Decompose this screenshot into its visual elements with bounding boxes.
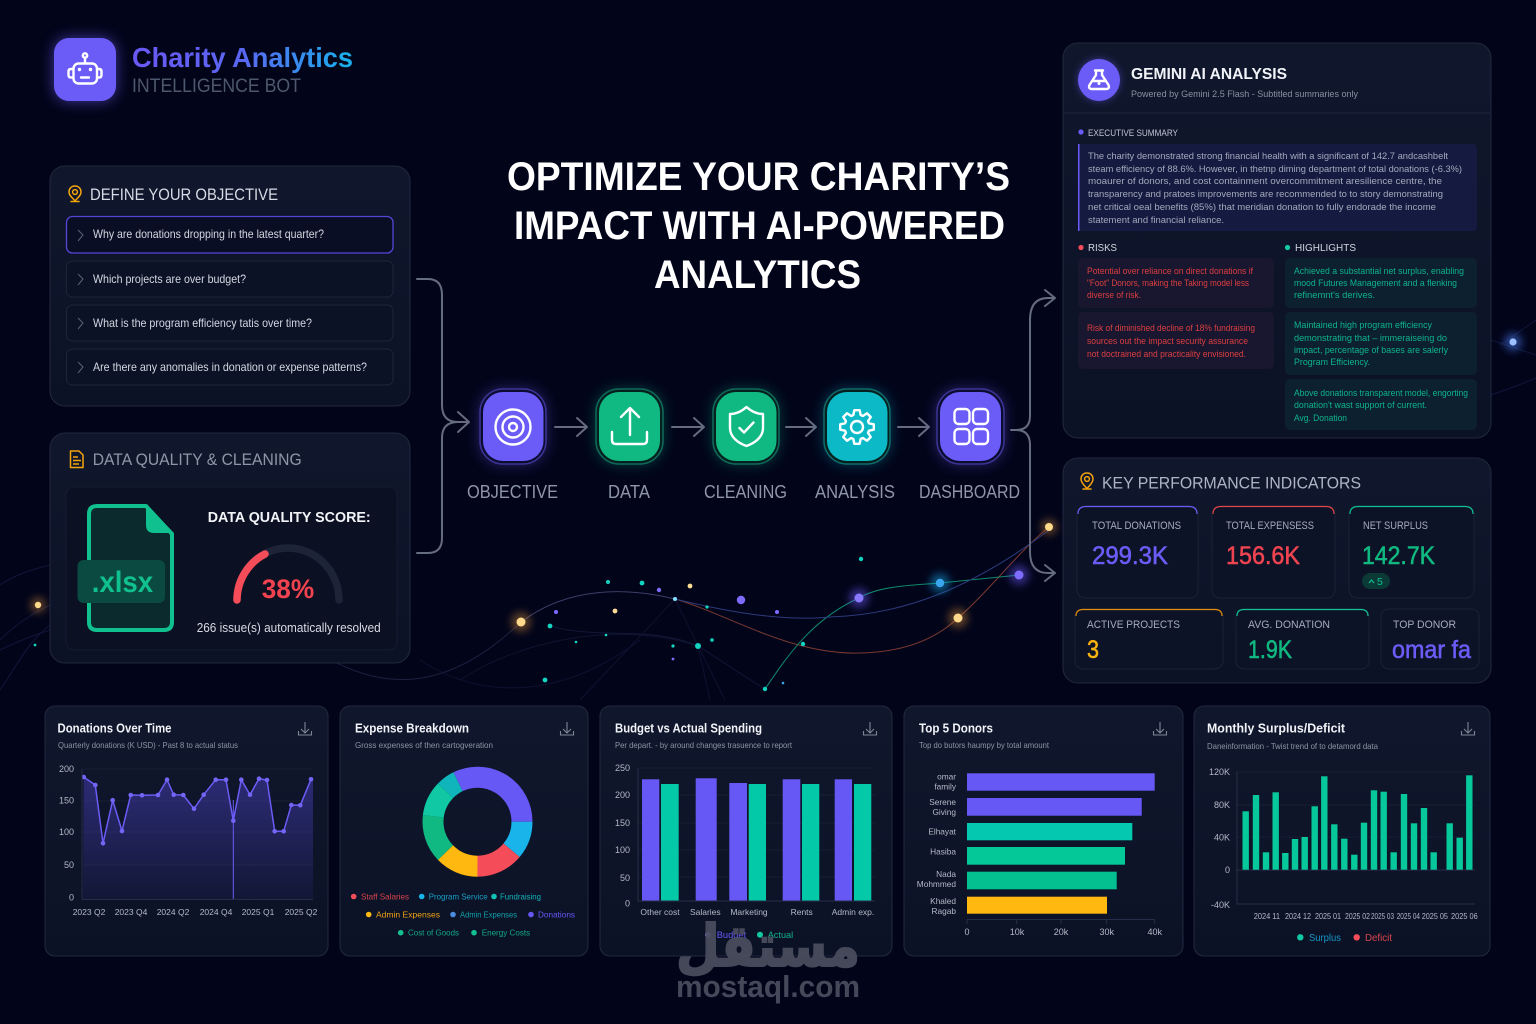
chart subtitle: Per depart. - by around changes trasuence to report — [615, 740, 793, 750]
column chart: -40K — [1211, 900, 1230, 910]
chart card: monthly surplus deficit — [1194, 706, 1490, 956]
horizontal bar chart: Serene — [929, 797, 956, 807]
brand subtitle: INTELLIGENCE BOT — [132, 76, 301, 97]
bar legend: Budget — [717, 930, 747, 941]
chart card: expense breakdown — [340, 706, 588, 956]
grouped bar chart — [615, 763, 875, 917]
arrow — [898, 418, 929, 436]
step: objective — [467, 389, 558, 502]
horizontal bar chart: 20k — [1054, 927, 1069, 937]
risk card 2: sources out the impact security assurance — [1087, 336, 1248, 347]
kpi: top donor: omar fa — [1392, 636, 1471, 664]
column legend: Deficit — [1365, 933, 1392, 944]
executive summary text: statement and financial reliance. — [1088, 215, 1224, 226]
donut legend: Donations — [538, 910, 575, 920]
question 3: What is the program efficiency tatis over time? — [93, 316, 312, 330]
highlight card 3: donation't wast support of current. — [1294, 400, 1427, 411]
line chart: 0 — [69, 892, 74, 902]
kpi: active projects — [1075, 609, 1223, 669]
main title — [507, 155, 1010, 297]
step: cleaning — [704, 389, 787, 502]
chart title: Top 5 Donors — [919, 720, 993, 736]
donut legend: Energy Costs — [482, 928, 530, 938]
line chart: 2025 Q1 — [242, 907, 275, 917]
line chart: 2025 Q2 — [285, 907, 318, 917]
kpi: total donations: TOTAL DONATIONS — [1092, 520, 1181, 532]
horizontal bar chart: Ragab — [932, 906, 956, 916]
panel: data quality and cleaning — [50, 433, 410, 663]
panel: gemini ai analysis — [1063, 43, 1491, 438]
question 1 (selected) — [66, 216, 393, 253]
highlight card 3: Avg. Donation — [1294, 413, 1347, 424]
kpi: total expenses: TOTAL EXPENSESS — [1226, 520, 1314, 532]
question 3 — [66, 305, 393, 341]
kpi: total donations: 299.3K — [1092, 542, 1168, 570]
executive summary text: The charity demonstrated strong financial health with a significant of 142.7 andcashbelt — [1088, 151, 1448, 162]
executive summary text: steam efficiency of 88.6%. However, in thetnp diming department of total donations (-6.3%) — [1088, 164, 1462, 175]
main title: ANALYTICS — [654, 253, 861, 297]
horizontal bar chart: Giving — [932, 807, 956, 817]
arrow — [555, 418, 587, 436]
connector: panels to objective — [417, 279, 469, 553]
bar legend: Actual — [768, 930, 793, 941]
column chart: 0 — [1225, 865, 1230, 875]
grouped bar chart: 150 — [615, 818, 630, 828]
line chart: 2023 Q2 — [73, 907, 106, 917]
highlight card 3: Above donations transparent model, engorting — [1294, 388, 1468, 399]
risk card 1 — [1078, 258, 1274, 308]
main title: IMPACT WITH AI-POWERED — [514, 204, 1005, 248]
risk card 2 — [1078, 312, 1274, 369]
grouped bar chart: 0 — [625, 898, 630, 908]
kpi: total donations — [1077, 506, 1198, 598]
icon: flask — [1078, 59, 1120, 101]
question 4 — [66, 349, 393, 385]
line chart: 2023 Q4 — [115, 907, 148, 917]
highlight card 1: mood Futures Management and a flenking — [1294, 278, 1457, 289]
heading: define your objective: DEFINE YOUR OBJECTIVE — [90, 186, 278, 204]
column chart — [1209, 767, 1478, 921]
column chart: 2025 06 — [1451, 911, 1478, 921]
panel: define your objective — [50, 166, 410, 406]
chart subtitle: Gross expenses of then cartogveration — [355, 740, 493, 750]
line chart: 2024 Q2 — [157, 907, 190, 917]
grouped bar chart: Rents — [791, 907, 813, 917]
horizontal bar chart: omar — [937, 772, 956, 782]
arrow — [672, 418, 704, 436]
chart title: Budget vs Actual Spending — [615, 720, 762, 736]
line chart: 100 — [59, 827, 74, 837]
logo icon: robot — [54, 38, 116, 101]
column chart: 2024 11 — [1254, 911, 1280, 921]
icon: download — [1462, 722, 1474, 735]
step: dashboard: DASHBOARD — [919, 482, 1020, 502]
heading: gemini: GEMINI AI ANALYSIS — [1131, 66, 1287, 83]
column chart: 120K — [1209, 767, 1230, 777]
connector: dashboard to panels — [1011, 290, 1055, 581]
highlight card 2 — [1285, 312, 1477, 375]
grouped bar chart: 250 — [615, 763, 630, 773]
kpi: total expenses: 156.6K — [1226, 542, 1300, 570]
icon: download — [560, 722, 574, 735]
icon: document — [70, 451, 83, 468]
horizontal bar chart: 40k — [1147, 927, 1162, 937]
chart subtitle: Top do butors haumpy by total amount — [919, 740, 1050, 750]
grouped bar chart: 100 — [615, 845, 630, 855]
horizontal bar chart: 30k — [1099, 927, 1114, 937]
grouped bar chart: Admin exp. — [832, 907, 874, 917]
column legend — [1297, 933, 1392, 944]
step: data — [596, 389, 663, 502]
risk card 1: diverse of risk. — [1087, 290, 1141, 301]
heading: data quality: DATA QUALITY & CLEANING — [93, 451, 302, 469]
icon: objective pin — [69, 186, 81, 202]
highlight card 1: refinemnt's derives. — [1294, 290, 1375, 301]
line chart — [59, 764, 318, 917]
kpi: net surplus: NET SURPLUS — [1363, 520, 1428, 532]
gauge: 38 percent — [237, 548, 339, 604]
question 1 (selected): Why are donations dropping in the latest quarter? — [93, 227, 324, 241]
column chart: 40K — [1214, 832, 1230, 842]
question 2 — [66, 261, 393, 297]
horizontal bar chart: family — [934, 782, 957, 792]
chart title: Monthly Surplus/Deficit — [1207, 720, 1346, 736]
main title: OPTIMIZE YOUR CHARITY’S — [507, 155, 1010, 199]
risk card 1: Potential over reliance on direct donations if — [1087, 266, 1253, 277]
question 2: Which projects are over budget? — [93, 272, 246, 286]
column chart: 2025 02 — [1345, 911, 1370, 921]
step: dashboard — [919, 389, 1020, 502]
horizontal bar chart: Elhayat — [928, 826, 957, 836]
horizontal bar chart: Mohmmed — [917, 879, 956, 889]
highlight card 2: Program Efficiency. — [1294, 357, 1370, 368]
grouped bar chart: Marketing — [730, 907, 768, 917]
brand title: Charity Analytics — [132, 42, 353, 73]
chart card: top 5 donors — [904, 706, 1183, 956]
kpi: top donor — [1381, 609, 1479, 669]
watermark: مستقل — [676, 912, 860, 980]
donut legend: Admin Expenses — [460, 910, 517, 920]
chart subtitle: Quarterly donations (K USD) - Past 8 to actual status — [58, 740, 238, 750]
column chart: 2025 04 — [1397, 911, 1420, 921]
risk card 2: Risk of diminished decline of 18% fundraising — [1087, 323, 1255, 334]
subheading: gemini: Powered by Gemini 2.5 Flash - Subtitled summaries only — [1131, 89, 1358, 100]
step: analysis: ANALYSIS — [815, 482, 895, 502]
horizontal bar chart: Khaled — [930, 896, 956, 906]
chart title: Donations Over Time — [58, 720, 172, 736]
kpi: average donation: 1.9K — [1248, 636, 1292, 664]
kpi: top donor: TOP DONOR — [1393, 619, 1456, 631]
line chart: 2024 Q4 — [200, 907, 233, 917]
chart card: budget vs actual — [600, 706, 892, 956]
executive summary text — [1078, 144, 1477, 231]
highlights label: HIGHLIGHTS — [1295, 242, 1356, 254]
donut legend: Cost of Goods — [408, 928, 459, 938]
donut legend — [351, 892, 575, 938]
horizontal bar chart: 10k — [1010, 927, 1025, 937]
executive summary label: EXECUTIVE SUMMARY — [1088, 128, 1178, 138]
kpi: active projects: ACTIVE PROJECTS — [1087, 619, 1180, 631]
step: data: DATA — [608, 482, 650, 502]
horizontal bar chart: 0 — [964, 927, 970, 937]
score label: DATA QUALITY SCORE: — [208, 510, 371, 526]
question 4: Are there any anomalies in donation or expense patterns? — [93, 360, 367, 374]
watermark: mostaql.com — [676, 969, 860, 1004]
heading: kpi: KEY PERFORMANCE INDICATORS — [1102, 474, 1361, 492]
horizontal bar chart — [917, 772, 1162, 937]
icon: download — [1154, 722, 1166, 735]
icon: kpi pin — [1081, 473, 1093, 489]
kpi: net surplus: 142.7K — [1362, 542, 1435, 570]
chart title: Expense Breakdown — [355, 720, 469, 736]
executive summary text: transparency and pratoes improvements are recommended to to story demonstrating — [1088, 189, 1443, 200]
donut chart — [433, 777, 522, 866]
grouped bar chart: Other cost — [640, 907, 680, 917]
line chart: 200 — [59, 764, 74, 774]
step: cleaning: CLEANING — [704, 482, 787, 502]
risk card 1: "Foot" Donors, making the Taking model less — [1087, 278, 1249, 289]
column chart: 2025 03 — [1371, 911, 1394, 921]
line chart: 50 — [64, 860, 74, 870]
column chart: 80K — [1214, 800, 1230, 810]
chart subtitle: Daneinformation - Twist trend of to detamord data — [1207, 741, 1378, 751]
bar legend — [705, 930, 793, 941]
kpi: average donation: AVG. DONATION — [1248, 619, 1330, 631]
issues note: 266 issue(s) automatically resolved — [197, 621, 381, 635]
highlight card 2: impact, percentage of bases are salerly — [1294, 345, 1448, 356]
risk card 2: not doctrained and practicality envisioned. — [1087, 349, 1246, 360]
watermark — [676, 912, 860, 1004]
inner card — [66, 487, 397, 650]
icon: download — [864, 722, 876, 735]
step: analysis — [815, 389, 895, 502]
column chart: 2025 05 — [1422, 911, 1448, 921]
kpi: average donation — [1236, 609, 1369, 669]
gauge: 38 percent: 38% — [262, 574, 314, 604]
donut legend: Fundraising — [500, 892, 541, 902]
chart card: donations over time — [45, 706, 328, 956]
column chart: 2025 01 — [1315, 911, 1341, 921]
horizontal bar chart: Nada — [936, 869, 956, 879]
grouped bar chart: 200 — [615, 790, 630, 800]
column legend: Surplus — [1309, 933, 1341, 944]
executive summary text: moaurer of donors, and cost containment overcommitment aresilience centre, the — [1088, 176, 1442, 187]
kpi: net surplus — [1349, 506, 1474, 598]
icon: xlsx file — [78, 505, 174, 630]
highlight card 1 — [1285, 258, 1477, 308]
highlight card 1: Achieved a substantial net surplus, enabling — [1294, 266, 1464, 277]
grouped bar chart: Salaries — [690, 907, 721, 917]
kpi: total expenses — [1212, 506, 1335, 598]
kpi: active projects: 3 — [1087, 636, 1099, 664]
line chart: 150 — [59, 796, 74, 806]
donut legend: Program Service — [429, 892, 488, 902]
grouped bar chart: 50 — [620, 873, 630, 883]
icon: download — [298, 722, 312, 735]
donut legend: Staff Salaries — [361, 892, 409, 902]
highlight card 3 — [1285, 379, 1477, 430]
step: objective: OBJECTIVE — [467, 482, 558, 502]
risks label: RISKS — [1088, 242, 1117, 254]
kpi: net surplus: 5 — [1377, 576, 1383, 588]
network decoration — [0, 320, 1536, 700]
panel: key performance indicators — [1063, 458, 1491, 683]
donut legend: Admin Expenses — [376, 910, 440, 920]
highlight card 2: Maintained high program efficiency — [1294, 320, 1432, 331]
executive summary text: net critical oeal benefits (85%) that meridian donation to fully endorade the income — [1088, 202, 1436, 213]
column chart: 2024 12 — [1285, 911, 1311, 921]
icon: xlsx file: .xlsx — [92, 566, 153, 599]
highlight card 2: demonstrating that – immeraiseing do — [1294, 333, 1447, 344]
horizontal bar chart: Hasiba — [930, 846, 956, 856]
arrow — [786, 418, 816, 436]
